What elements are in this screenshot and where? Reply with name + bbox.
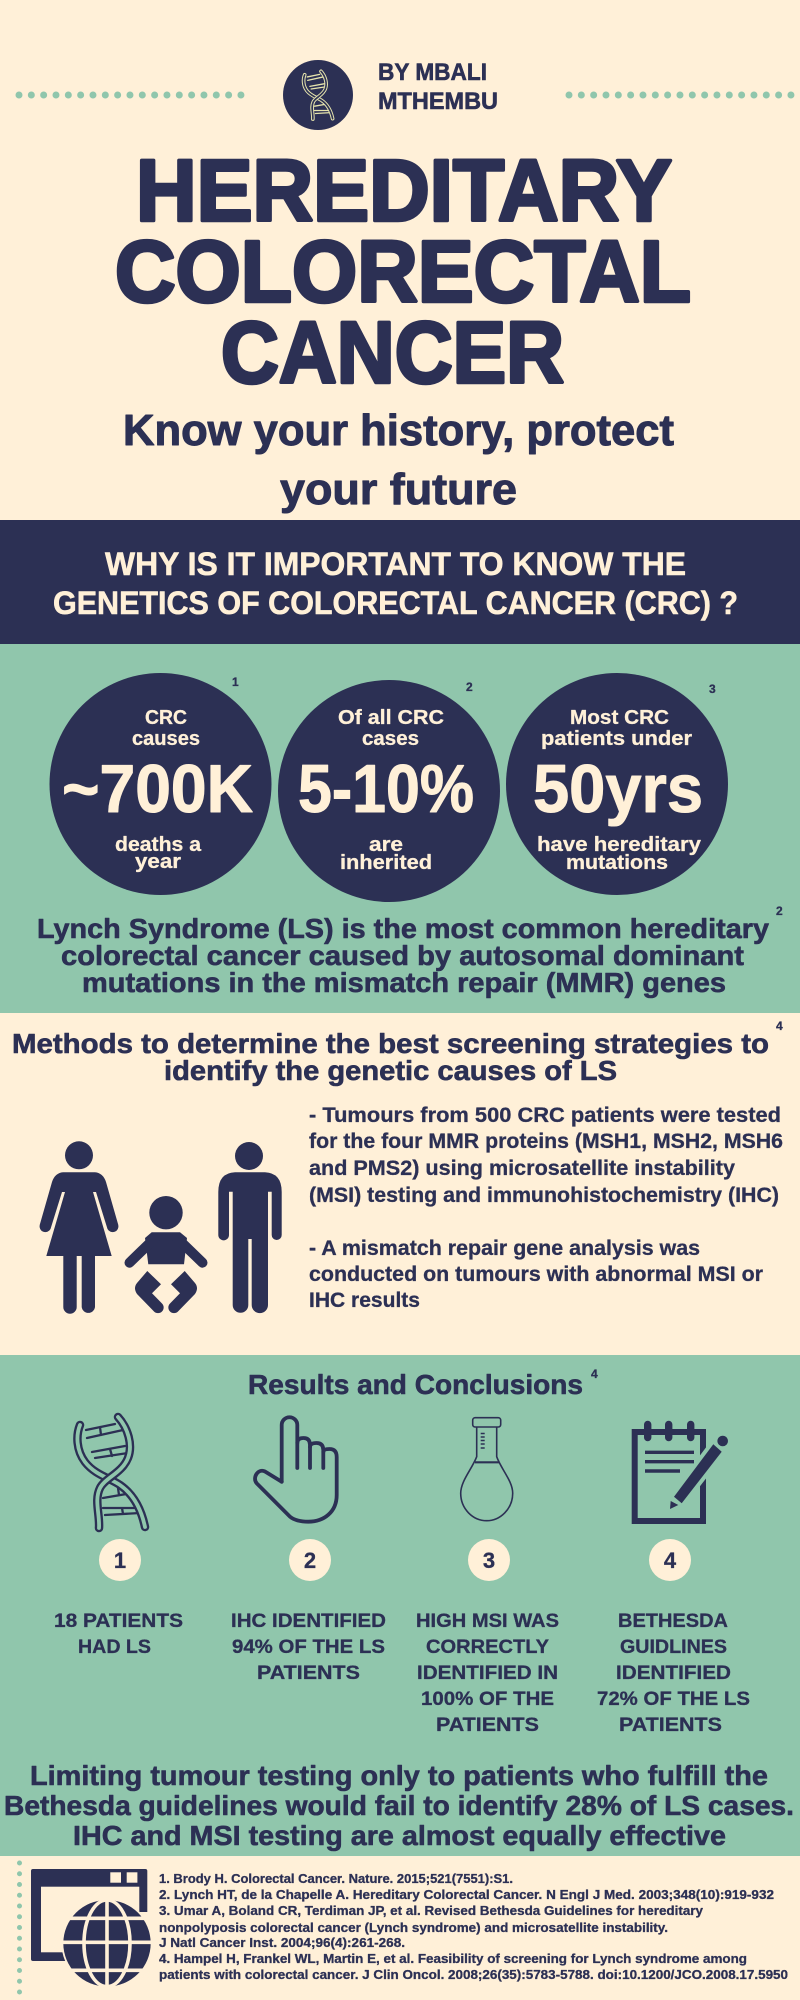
methods heading: Methods to determine the best screening strategies to <box>12 1028 769 1059</box>
methods text <box>309 1104 783 1312</box>
number badge 3 <box>468 1539 510 1581</box>
title: COLORECTAL <box>115 224 691 320</box>
result 4 text: PATIENTS <box>619 1715 722 1736</box>
result 1 text: 18 PATIENTS <box>54 1611 183 1632</box>
results heading: Results and Conclusions <box>248 1369 583 1400</box>
number badge 1: 1 <box>114 1548 126 1573</box>
result 1 text: HAD LS <box>78 1637 151 1658</box>
author byline: BY MBALI <box>378 59 487 86</box>
number badge 1 <box>99 1539 141 1581</box>
subtitle: your future <box>280 465 517 514</box>
result 2 text: PATIENTS <box>257 1663 360 1684</box>
reference list: 1. Brody H. Colorectal Cancer. Nature. 2015;521(7551):S1. <box>159 1871 513 1886</box>
panel: methods <box>0 1013 800 1355</box>
methods text: - A mismatch repair gene analysis was <box>309 1237 700 1260</box>
stat circle: under 50: have hereditary <box>537 834 702 856</box>
icon: browser window and globe <box>31 1869 154 1988</box>
result 3 text <box>416 1611 559 1736</box>
number badge 2: 2 <box>304 1548 316 1573</box>
reference list: 2. Lynch HT, de la Chapelle A. Hereditary Colorectal Cancer. N Engl J Med. 2003;348(10):919-932 <box>159 1887 774 1902</box>
subtitle: Know your history, protect <box>123 406 674 455</box>
stat circle: inherited <box>278 680 500 902</box>
methods text: (MSI) testing and immunohistochemistry (IHC) <box>309 1184 779 1207</box>
title: CANCER <box>221 304 564 402</box>
stat circle: deaths: deaths a <box>115 834 202 856</box>
stat circle: inherited: are <box>369 834 403 856</box>
stat circle: deaths: causes <box>132 728 200 750</box>
stat circle: inherited: cases <box>362 728 419 750</box>
methods text: conducted on tumours with abnormal MSI or <box>309 1263 763 1286</box>
result 3 text: HIGH MSI WAS <box>416 1611 559 1632</box>
reference list: 3. Umar A, Boland CR, Terdiman JP, et al. Revised Bethesda Guidelines for hereditary <box>159 1903 704 1918</box>
author byline: MTHEMBU <box>378 88 498 115</box>
citation markers: 2 <box>776 904 783 918</box>
stat circle: deaths: ~700K <box>62 751 253 827</box>
icon: logo dna circle <box>283 60 353 130</box>
panel: header <box>0 0 800 520</box>
subtitle <box>123 406 674 514</box>
panel: question banner <box>0 520 800 644</box>
right dotted line <box>569 92 793 98</box>
number badge 2 <box>289 1539 331 1581</box>
result 3 text: CORRECTLY <box>426 1637 549 1658</box>
icon: father <box>218 1142 282 1313</box>
methods text: for the four MMR proteins (MSH1, MSH2, MSH6 <box>309 1130 783 1153</box>
icon: dna <box>77 1417 145 1528</box>
banner heading <box>53 546 738 621</box>
result 1 text <box>54 1611 183 1658</box>
reference list: J Natl Cancer Inst. 2004;96(4):261-268. <box>159 1935 405 1950</box>
result 3 text: 100% OF THE <box>421 1689 554 1710</box>
lynch syndrome statement: Lynch Syndrome (LS) is the most common hereditary <box>37 913 769 944</box>
number badge 4 <box>649 1539 691 1581</box>
conclusion statement: IHC and MSI testing are almost equally effective <box>73 1820 726 1851</box>
result 3 text: IDENTIFIED IN <box>417 1663 558 1684</box>
number badge 4: 4 <box>664 1548 677 1573</box>
result 4 text: IDENTIFIED <box>616 1663 731 1684</box>
banner heading: WHY IS IT IMPORTANT TO KNOW THE <box>105 546 686 582</box>
title: HEREDITARY <box>136 142 672 240</box>
icon: notebook and pencil <box>635 1424 728 1521</box>
conclusion statement: Bethesda guidelines would fail to identify 28% of LS cases. <box>4 1790 794 1821</box>
panel: references <box>0 1856 800 2000</box>
result 2 text: 94% OF THE LS <box>232 1637 385 1658</box>
stat circle: deaths: CRC <box>145 707 187 729</box>
methods heading: identify the genetic causes of LS <box>164 1055 617 1086</box>
methods text: - Tumours from 500 CRC patients were tested <box>309 1104 781 1127</box>
icon: family <box>40 1141 282 1314</box>
result 3 text: PATIENTS <box>436 1715 539 1736</box>
panel: results <box>0 1355 800 1856</box>
author byline <box>378 59 498 115</box>
stat circle: under 50: mutations <box>566 852 668 874</box>
number badge 3: 3 <box>483 1548 495 1573</box>
citation markers: 1 <box>232 675 239 689</box>
reference list: nonpolyposis colorectal cancer (Lynch syndrome) and microsatellite instability. <box>159 1920 668 1935</box>
methods text: IHC results <box>309 1289 420 1312</box>
conclusion statement: Limiting tumour testing only to patients who fulfill the <box>30 1760 768 1791</box>
vertical dotted line <box>17 1863 22 1994</box>
methods text: and PMS2) using microsatellite instability <box>309 1157 735 1180</box>
icon: pointing hand <box>255 1417 337 1522</box>
stat circle: under 50: 50yrs <box>533 751 703 827</box>
result 4 text: 72% OF THE LS <box>597 1689 750 1710</box>
citation markers <box>232 675 783 918</box>
icon: flask <box>461 1418 513 1521</box>
reference list: 4. Hampel H, Frankel WL, Martin E, et al. Feasibility of screening for Lynch syndrome among <box>159 1951 747 1966</box>
reference list <box>159 1871 788 1982</box>
icon: mother <box>40 1141 118 1314</box>
stat circle: deaths: year <box>135 851 181 873</box>
results heading: 4 <box>591 1367 598 1381</box>
stat circle: inherited: inherited <box>340 852 432 874</box>
banner heading: GENETICS OF COLORECTAL CANCER (CRC) ? <box>53 585 738 621</box>
stat circle: under 50 <box>506 673 728 895</box>
reference list: patients with colorectal cancer. J Clin Oncol. 2008;26(35):5783-5788. doi:10.1200/JCO.2008.17.5950 <box>159 1967 788 1982</box>
stat circle: under 50: patients under <box>541 728 692 750</box>
stat circle: deaths <box>50 673 272 895</box>
result 2 text: IHC IDENTIFIED <box>231 1611 386 1632</box>
result 4 text: GUIDLINES <box>620 1637 727 1658</box>
lynch syndrome statement: mutations in the mismatch repair (MMR) genes <box>82 967 726 998</box>
methods heading <box>12 1019 783 1086</box>
left dotted line <box>19 92 243 98</box>
conclusion statement <box>4 1760 794 1851</box>
result 2 text <box>231 1611 386 1684</box>
stat circle: inherited: Of all CRC <box>338 707 444 729</box>
result 4 text <box>597 1611 750 1736</box>
methods heading: 4 <box>776 1019 783 1033</box>
result 4 text: BETHESDA <box>618 1611 728 1632</box>
stat circle: inherited: 5-10% <box>298 751 474 827</box>
lynch syndrome statement <box>37 913 769 998</box>
icon: baby <box>130 1196 202 1313</box>
citation markers: 2 <box>466 680 473 694</box>
stat circle: under 50: Most CRC <box>570 707 669 729</box>
citation markers: 3 <box>709 682 716 696</box>
title <box>115 142 691 402</box>
lynch syndrome statement: colorectal cancer caused by autosomal dominant <box>61 940 744 971</box>
panel: statistics <box>0 644 800 1013</box>
